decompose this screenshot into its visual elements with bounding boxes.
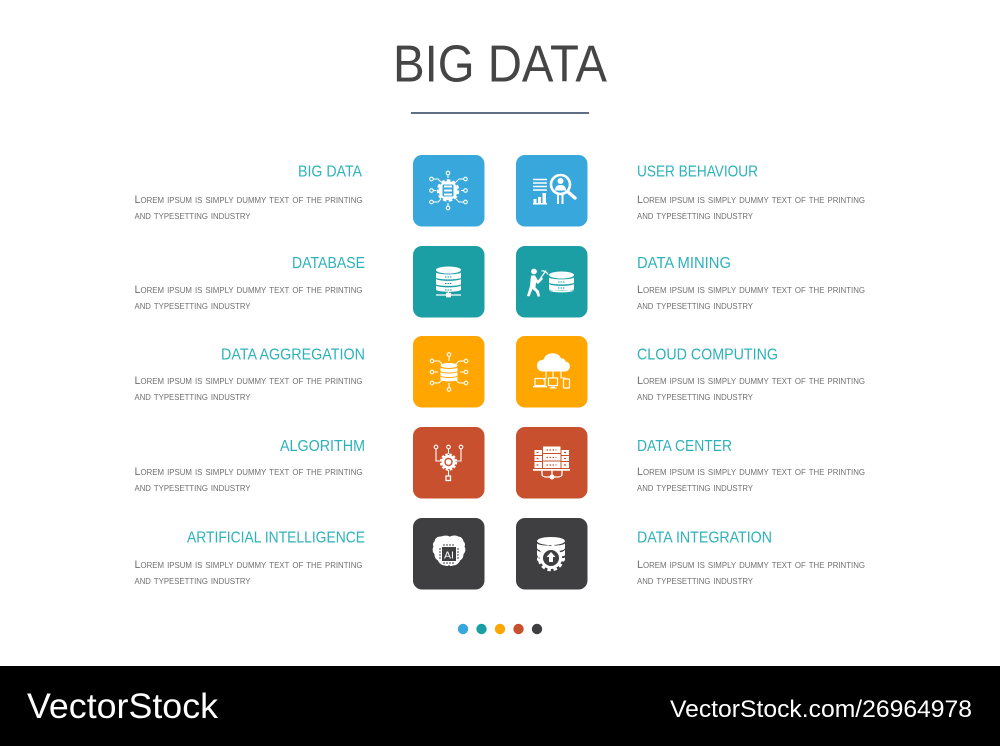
pagination dots bbox=[458, 624, 542, 634]
right text: data center: and typesetting industry bbox=[637, 482, 754, 494]
left text: artificial intelligence bbox=[134, 530, 365, 587]
tile: data center icon bbox=[516, 427, 588, 498]
right text: data center bbox=[637, 438, 865, 494]
right text: user behaviour: and typesetting industry bbox=[637, 210, 754, 222]
footer bar bbox=[0, 666, 1000, 746]
right text: user behaviour bbox=[637, 164, 865, 222]
right text: data integration: and typesetting industry bbox=[637, 575, 754, 587]
right text: data integration bbox=[637, 530, 865, 587]
tile: user behaviour icon bbox=[516, 155, 588, 226]
left text: big data: Lorem ipsum is simply dummy text of the printing bbox=[134, 194, 362, 206]
right text: data mining bbox=[637, 255, 865, 312]
right text: cloud computing: and typesetting industry bbox=[637, 391, 754, 403]
left text: data aggregation: DATA AGGREGATION bbox=[221, 346, 365, 364]
left text: database: Lorem ipsum is simply dummy text of the printing bbox=[134, 284, 362, 296]
tile: artificial intelligence icon bbox=[413, 518, 484, 590]
left text: data aggregation: Lorem ipsum is simply dummy text of the printing bbox=[134, 375, 362, 387]
left text: big data: and typesetting industry bbox=[134, 210, 251, 222]
left text: algorithm: Lorem ipsum is simply dummy text of the printing bbox=[134, 466, 362, 478]
left text: big data bbox=[134, 164, 363, 222]
right text: data center: DATA CENTER bbox=[637, 438, 732, 455]
left text: artificial intelligence: and typesetting industry bbox=[134, 575, 251, 587]
right text: data integration: DATA INTEGRATION bbox=[637, 530, 772, 546]
right text: user behaviour: Lorem ipsum is simply dummy text of the printing bbox=[637, 194, 865, 206]
left text: data aggregation: and typesetting industry bbox=[134, 391, 251, 403]
tile: algorithm icon bbox=[413, 427, 484, 498]
tile: artificial intelligence icon: AI bbox=[444, 550, 454, 562]
left text: data aggregation bbox=[134, 346, 365, 403]
right text: cloud computing: CLOUD COMPUTING bbox=[637, 346, 778, 364]
tile: data mining icon bbox=[516, 246, 588, 318]
left text: database: and typesetting industry bbox=[134, 300, 251, 312]
left text: algorithm: and typesetting industry bbox=[134, 482, 251, 494]
footer bar: VectorStock bbox=[27, 687, 219, 726]
right text: data mining: DATA MINING bbox=[637, 255, 731, 272]
right text: user behaviour: USER BEHAVIOUR bbox=[637, 164, 758, 180]
tile: cloud computing icon bbox=[516, 336, 588, 408]
left text: algorithm bbox=[134, 438, 365, 494]
left text: big data: BIG DATA bbox=[298, 164, 363, 180]
right text: data mining: and typesetting industry bbox=[637, 300, 754, 312]
footer bar: VectorStock.com/26964978 bbox=[670, 696, 972, 723]
left text: algorithm: ALGORITHM bbox=[280, 438, 365, 455]
left text: database bbox=[134, 255, 365, 312]
tile: data integration icon bbox=[516, 518, 588, 590]
tile: database icon bbox=[413, 246, 484, 318]
right text: cloud computing: Lorem ipsum is simply dummy text of the printing bbox=[637, 375, 865, 387]
right text: data mining: Lorem ipsum is simply dummy text of the printing bbox=[637, 284, 865, 296]
left text: database: DATABASE bbox=[292, 255, 365, 272]
left text: artificial intelligence: Lorem ipsum is simply dummy text of the printing bbox=[134, 559, 362, 571]
left text: artificial intelligence: ARTIFICIAL INTELLIGENCE bbox=[187, 530, 365, 546]
tile: big data icon bbox=[413, 155, 484, 226]
right text: cloud computing bbox=[637, 346, 865, 403]
tile: data aggregation icon bbox=[413, 336, 484, 408]
title: BIG DATA bbox=[393, 36, 607, 94]
right text: data center: Lorem ipsum is simply dummy text of the printing bbox=[637, 466, 865, 478]
right text: data integration: Lorem ipsum is simply dummy text of the printing bbox=[637, 559, 865, 571]
